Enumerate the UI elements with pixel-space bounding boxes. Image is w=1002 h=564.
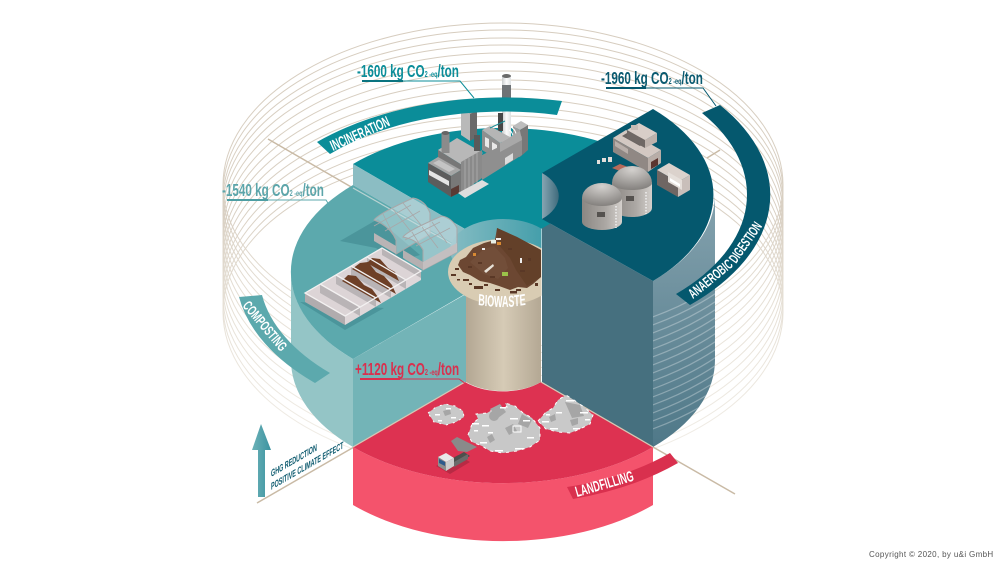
biowaste disc: [448, 239, 542, 304]
infographic: biowaste treatment cylinder: [222, 22, 992, 558]
value: composting: -1540 kg CO2 -eq/ton: [222, 181, 324, 201]
incineration sector top: [353, 128, 653, 251]
band: anaerobic digestion: ANAEROBIC: [685, 256, 736, 302]
band: anaerobic digestion: DIGESTION: [727, 220, 765, 266]
incineration wall: [353, 164, 503, 272]
value: anaerobic digestion: [601, 69, 716, 106]
landfill edge lines: [353, 382, 653, 447]
anaerobic digestion sector top: [542, 109, 713, 281]
band: anaerobic digestion: [676, 105, 770, 305]
band: landfilling: [567, 453, 678, 500]
band: composting: COMPOSTING: [239, 298, 290, 354]
axis lines: [257, 139, 735, 503]
arrow: GHG reduction: [252, 424, 271, 497]
band: landfilling: LANDFILLING: [573, 468, 636, 500]
greenhouses: [340, 198, 457, 270]
BIOWASTE label: BIOWASTE: [478, 294, 526, 308]
GHG reduction caption: POSITIVE CLIMATE EFFECT: [271, 439, 343, 492]
composting sector top: [291, 185, 503, 359]
anaerobic digestion plant: [582, 123, 690, 230]
central hole: [450, 219, 542, 259]
GHG reduction caption: GHG REDUCTION: [271, 441, 317, 479]
band: incineration: INCINERATION: [328, 113, 392, 154]
landfilling sector: [353, 382, 653, 541]
biowaste pillar: [466, 288, 541, 391]
composting wall: [291, 272, 466, 447]
band: incineration: [317, 97, 562, 154]
concentric contour rings: [223, 23, 783, 474]
value: incineration: -1600 kg CO2 -eq/ton: [357, 62, 459, 82]
biowaste pile: [451, 228, 541, 294]
value: composting: [222, 181, 331, 208]
hole in anaerobic sector: [542, 173, 559, 219]
value: anaerobic digestion: -1960 kg CO2 -eq/ton: [601, 69, 703, 89]
band: composting: [239, 295, 330, 383]
value: incineration: [357, 62, 474, 98]
landfill waste piles: [428, 395, 593, 453]
anaerobic digestion walls: [542, 196, 715, 447]
dump truck: [436, 437, 477, 474]
composting bins: [300, 248, 421, 330]
axis line on composting: [353, 188, 462, 250]
value: landfilling: +1120 kg CO2 -eq/ton: [355, 360, 459, 380]
incineration plant: [428, 74, 528, 198]
copyright: Copyright © 2020, by u&i GmbH: [869, 550, 994, 559]
